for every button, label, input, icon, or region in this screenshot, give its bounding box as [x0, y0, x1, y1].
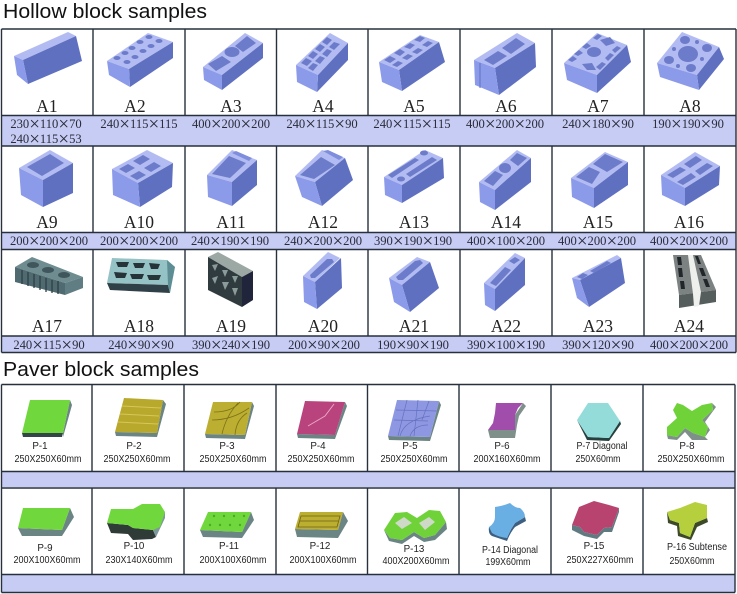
paver P-11 — [200, 512, 254, 538]
block A20 — [303, 252, 342, 309]
block A12 — [295, 150, 353, 206]
block A17 — [15, 257, 83, 295]
size A16: 400×200×200 — [650, 230, 728, 252]
label A13: A13 — [399, 212, 429, 232]
label A8: A8 — [679, 96, 701, 116]
size A4: 240×115×90 — [286, 114, 358, 134]
size P-14: 199X60mm — [486, 557, 530, 568]
size A5: 240×115×115 — [373, 114, 451, 134]
title: paver block samples: Paver block samples — [3, 358, 199, 381]
block A7 — [564, 33, 631, 93]
block A18 — [107, 258, 175, 293]
label P-12: P-12 — [310, 541, 330, 552]
paver P-4 — [297, 401, 347, 439]
label A9: A9 — [36, 212, 58, 232]
block A3 — [203, 33, 263, 90]
title: hollow block samples: Hollow block samples — [3, 0, 207, 23]
size P-2: 250X250X60mm — [104, 454, 170, 465]
label P-5: P-5 — [402, 441, 418, 452]
paver P-9 — [18, 508, 74, 536]
label A17: A17 — [32, 316, 62, 336]
block A16 — [661, 152, 720, 206]
label P-7: P-7 Diagonal — [576, 441, 628, 452]
block A9 — [19, 150, 73, 207]
paver P-12 — [295, 512, 348, 538]
paver P-5 — [388, 400, 441, 441]
label P-14: P-14 Diagonal — [482, 545, 538, 556]
block A6 — [474, 33, 536, 95]
block A14 — [479, 150, 531, 210]
size A7: 240×180×90 — [562, 114, 634, 134]
size A21: 190×90×190 — [377, 334, 449, 356]
size A15: 400×200×200 — [558, 230, 636, 252]
paver P-2 — [115, 398, 166, 437]
block A5 — [379, 35, 445, 91]
size P-8: 250X250X60mm — [658, 454, 724, 465]
size A1: 240×115×53 — [10, 128, 82, 150]
size P-13: 400X200X60mm — [382, 556, 450, 567]
panel: hollow block table — [2, 29, 736, 356]
label A3: A3 — [220, 96, 242, 116]
size P-16: 250X60mm — [670, 556, 714, 567]
label A18: A18 — [124, 316, 154, 336]
size A14: 400×100×200 — [467, 230, 545, 252]
block A10 — [112, 150, 173, 207]
block A22 — [484, 253, 525, 311]
paver P-10 — [107, 504, 165, 540]
size A11: 240×190×190 — [191, 230, 269, 252]
label P-10: P-10 — [124, 541, 145, 552]
size A1: 230×110×70 — [10, 114, 82, 134]
size A20: 200×90×200 — [288, 334, 360, 356]
label A21: A21 — [399, 316, 429, 336]
label P-9: P-9 — [37, 543, 53, 554]
size P-12: 200X100X60mm — [290, 555, 356, 566]
size A12: 240×200×200 — [284, 230, 362, 252]
label A24: A24 — [674, 316, 704, 336]
label A15: A15 — [583, 212, 613, 232]
label A16: A16 — [674, 212, 704, 232]
size A10: 200×200×200 — [100, 230, 178, 252]
label A2: A2 — [124, 96, 146, 116]
label P-3: P-3 — [219, 441, 235, 452]
paver P-14 — [489, 503, 526, 541]
block A2 — [107, 33, 173, 87]
panel: paver block table — [2, 384, 735, 592]
block A1 — [14, 32, 82, 84]
size P-1: 250X250X60mm — [14, 454, 82, 465]
size A13: 390×190×190 — [374, 230, 452, 252]
label A4: A4 — [312, 96, 334, 116]
size A8: 190×190×90 — [652, 114, 724, 134]
size A22: 390×100×190 — [467, 334, 545, 356]
size P-3: 250X250X60mm — [200, 454, 266, 465]
paver P-3 — [205, 402, 254, 439]
paver P-16 — [667, 502, 708, 540]
size A23: 390×120×90 — [562, 334, 634, 356]
paver P-1 — [22, 400, 72, 437]
size A2: 240×115×115 — [100, 114, 178, 134]
label P-2: P-2 — [126, 441, 142, 452]
size A6: 400×200×200 — [466, 114, 544, 134]
size A3: 400×200×200 — [192, 114, 270, 134]
label A6: A6 — [495, 96, 517, 116]
block A13 — [384, 150, 444, 203]
size A24: 400×200×200 — [650, 334, 728, 356]
label A7: A7 — [587, 96, 609, 116]
block A11 — [207, 150, 257, 206]
label A1: A1 — [36, 96, 58, 116]
size A18: 240×90×90 — [108, 334, 174, 356]
paver P-15 — [572, 501, 619, 539]
size P-15: 250X227X60mm — [566, 555, 634, 566]
label P-8: P-8 — [679, 441, 695, 452]
block A23 — [572, 255, 625, 307]
size P-5: 250X250X60mm — [380, 454, 448, 465]
label P-16: P-16 Subtense — [667, 542, 727, 553]
paver P-8 — [667, 403, 716, 440]
label A5: A5 — [403, 96, 425, 116]
paver P-7 — [577, 403, 621, 441]
label A11: A11 — [216, 212, 246, 232]
label P-1: P-1 — [32, 441, 48, 452]
size P-10: 230X140X60mm — [106, 555, 172, 566]
size P-11: 200X100X60mm — [200, 555, 266, 566]
paver P-6 — [488, 403, 526, 438]
block A15 — [571, 152, 628, 208]
label A12: A12 — [308, 212, 338, 232]
size A9: 200×200×200 — [10, 230, 88, 252]
label P-4: P-4 — [310, 441, 326, 452]
label A20: A20 — [308, 316, 338, 336]
label A23: A23 — [583, 316, 613, 336]
size A19: 390×240×190 — [192, 334, 270, 356]
size P-7: 250X60mm — [576, 454, 620, 465]
block A8 — [657, 32, 724, 90]
label P-11: P-11 — [219, 541, 239, 552]
label P-13: P-13 — [404, 544, 425, 555]
size A17: 240×115×90 — [13, 334, 85, 356]
label P-15: P-15 — [584, 541, 605, 552]
block A4 — [296, 33, 348, 92]
block A21 — [389, 257, 439, 312]
label A10: A10 — [124, 212, 154, 232]
block A24 — [673, 255, 716, 308]
label A22: A22 — [491, 316, 521, 336]
label P-6: P-6 — [494, 441, 510, 452]
size P-4: 250X250X60mm — [288, 454, 354, 465]
block A19 — [208, 252, 253, 307]
label A14: A14 — [491, 212, 521, 232]
size P-9: 200X100X60mm — [14, 555, 80, 566]
label A19: A19 — [216, 316, 246, 336]
paver P-13 — [384, 510, 447, 544]
size P-6: 200X160X60mm — [474, 454, 540, 465]
